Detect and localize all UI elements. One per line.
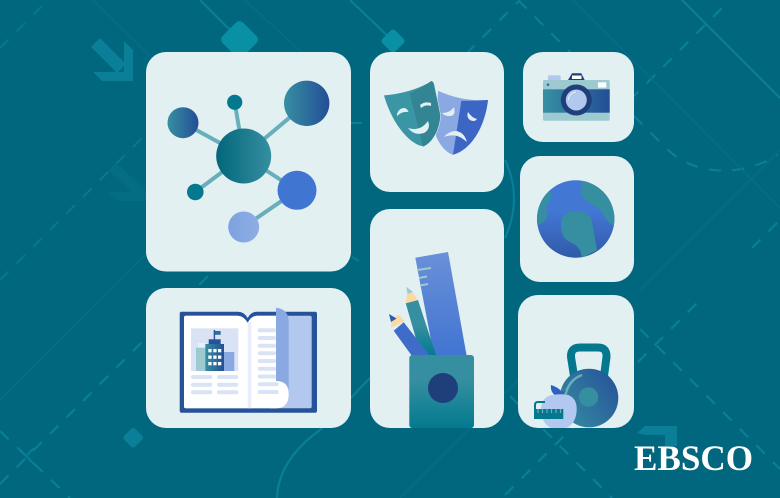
panel: network — [146, 52, 351, 272]
icon: ruler — [415, 252, 467, 356]
node: central — [216, 128, 271, 184]
icon: apple and tape measure — [534, 385, 577, 428]
page curl — [270, 381, 289, 408]
arrow: top left — [91, 38, 133, 81]
panel: camera — [523, 52, 634, 142]
page fold — [276, 308, 289, 394]
diamond: medium — [380, 28, 406, 54]
panel: globe — [520, 156, 634, 282]
panel: book — [146, 288, 351, 428]
node: upper left — [168, 107, 198, 138]
text lines: left page — [191, 375, 238, 394]
network links — [183, 102, 307, 227]
panel: fitness — [518, 295, 634, 428]
node: small top — [227, 95, 242, 110]
icon: kettlebell — [560, 348, 618, 427]
diamond: small — [122, 427, 144, 449]
node: light blue — [228, 212, 259, 242]
icon: sad mask — [436, 91, 488, 155]
logo: EBSCO: EBSCO — [634, 438, 753, 478]
arrow: bottom right — [637, 426, 677, 446]
illustration: building — [191, 328, 238, 371]
diamond: large — [219, 19, 260, 60]
node: blue — [278, 171, 316, 210]
node: upper right — [284, 81, 329, 126]
icon: open book — [180, 308, 317, 413]
icon: happy mask — [383, 81, 440, 147]
panel: theatre masks — [370, 52, 504, 192]
icon: cup — [409, 355, 474, 428]
icon: green pencil — [406, 287, 436, 356]
icon: blue pencil — [389, 314, 430, 356]
icon: camera — [543, 73, 610, 121]
icon: globe — [537, 180, 614, 258]
node: small lower left — [187, 184, 204, 200]
text lines: right page — [258, 328, 279, 394]
arrow: faint left — [108, 163, 146, 201]
panel: pencils and ruler — [370, 209, 504, 428]
